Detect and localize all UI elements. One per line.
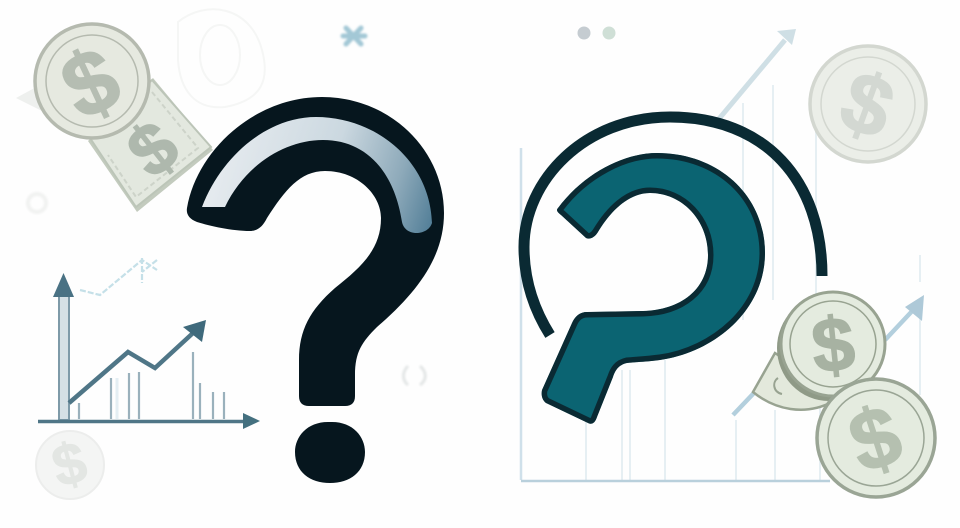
coin back	[777, 295, 881, 401]
icon: faint brackets	[404, 366, 425, 385]
trend arrow	[69, 333, 193, 403]
icon: coin top right	[810, 46, 926, 162]
icon: faint ring	[28, 194, 46, 212]
icon: banknote	[16, 78, 213, 212]
icon: coin top right: $	[829, 53, 906, 158]
arc around teal question mark	[524, 117, 822, 335]
faint ghost coin top centre	[178, 9, 265, 107]
bars	[79, 352, 224, 419]
icons: coin pile: $	[808, 301, 859, 390]
dot	[295, 422, 365, 483]
coin front	[817, 379, 935, 497]
faint dashed trend	[80, 258, 157, 295]
question mark: teal	[542, 153, 765, 424]
line chart: left	[38, 258, 260, 429]
x axis arrow	[38, 420, 245, 423]
faint chart: right	[521, 29, 924, 481]
icon: small asterisk	[343, 28, 365, 44]
highlight	[202, 117, 432, 233]
icon: two dots	[578, 26, 616, 40]
question mark: black	[187, 97, 444, 483]
arrow lower	[733, 308, 915, 415]
icons: coin pile	[753, 292, 935, 497]
icons: coin pile: $	[838, 387, 913, 492]
icon: faint coin bottom left: $	[45, 429, 93, 500]
banknote	[753, 353, 832, 410]
icon: coin top left: $	[47, 28, 135, 140]
icon: banknote: $	[113, 106, 194, 193]
arrow top	[718, 40, 785, 120]
y axis arrow	[59, 296, 69, 420]
